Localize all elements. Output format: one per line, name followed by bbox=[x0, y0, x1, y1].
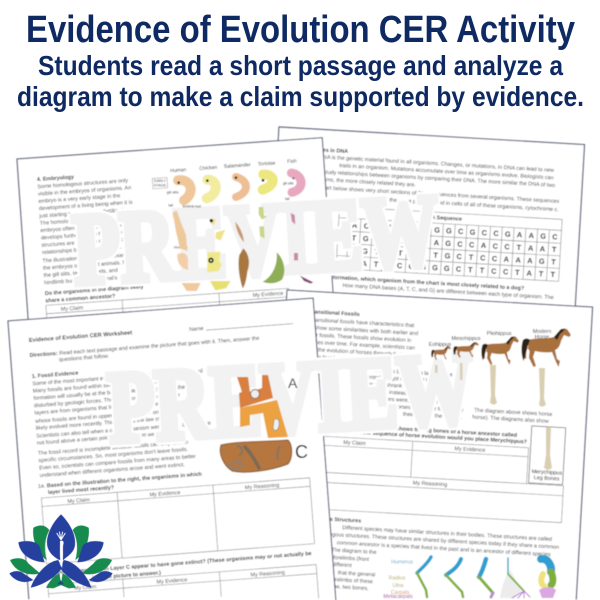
text block: homologous passage bbox=[311, 524, 560, 600]
text block: fossil evidence passage: formation will usually be at the bottom, unless the layers are then bbox=[33, 384, 188, 402]
text block: fossil evidence passage: specific circumstances. So, most organisms don't leave fossils. bbox=[38, 447, 188, 464]
illustration: horse evolution bbox=[429, 328, 571, 470]
watermark: PREVIEW bottom: PREVIEW bbox=[105, 332, 477, 465]
labels: horse names: Mesohippus bbox=[451, 336, 481, 342]
text block: embryology question bbox=[45, 284, 144, 304]
watermark: PREVIEW top: PREVIEW bbox=[70, 174, 442, 307]
text block: DNA passage: organisms, the more closely related they are. bbox=[308, 176, 416, 188]
illustration: fossil rock layers bbox=[220, 375, 308, 472]
text block: directions: Directions: Read each text passage and examine the picture that goes with it. Then, answer the bbox=[29, 336, 260, 359]
panel: embryology worksheet page bbox=[17, 138, 334, 329]
text block: embryology passage: the gill slits, tail, limb buds, and bbox=[43, 268, 118, 279]
labels: organism names: Tortoise bbox=[258, 160, 276, 168]
labels: horse names bbox=[429, 329, 551, 348]
table: question 1b CER: My Evidence bbox=[156, 577, 188, 586]
text block: embryology passage: Some homologous structures are only bbox=[37, 178, 129, 190]
text block: fossil evidence passage: likely evolved more recently. This is called the law of bbox=[36, 416, 161, 432]
text block: transitional fossils passage: The bones of horses became as large as the bbox=[346, 366, 453, 378]
labels: organism names bbox=[154, 158, 297, 249]
chart: DNA sequence table: ACATGCGGGCGCCGAAGC bbox=[352, 221, 559, 242]
text block: transitional fossils passage: their Hippus, the muscle. bbox=[403, 412, 462, 421]
form field: name bbox=[189, 319, 293, 333]
text block: Merychippus question: Merychippus. Based on this, where in the sequence of horse evolution would you place Merychippus? bbox=[265, 425, 527, 445]
text block: question 1a: layer lived most recently? bbox=[48, 485, 114, 496]
text block: transitional fossils passage: in horses are earlier found near bbox=[389, 404, 464, 414]
text block: transitional fossils passage: horses instead of other rapid central bbox=[371, 389, 457, 400]
text block: embryology passage: develops further. These homologous bbox=[41, 229, 128, 242]
text block: transitional fossils passage: show some similarities with both earlier and bbox=[314, 325, 418, 337]
text block: question 1a: 1a. Based on the illustration to the right, the organisms in which bbox=[38, 472, 202, 490]
text block: homologous passage: different bbox=[332, 562, 352, 569]
text block: fossil evidence passage: 1. Fossil Evidence bbox=[32, 370, 79, 380]
icon: peacock bbox=[47, 514, 75, 584]
illustration: homologous forelimbs bbox=[383, 557, 556, 600]
text block: directions: questions that follow. bbox=[59, 354, 109, 363]
text block: embryology passage: hindlimb buds in each animal's early bbox=[44, 274, 131, 286]
text block: embryology passage: the embryos of different animals. Note bbox=[43, 259, 134, 272]
text block: fossil evidence passage: Even so, scientists can compare fossils from many areas to better bbox=[39, 454, 196, 472]
text block: embryology passage: embryo is a very early stage in the bbox=[38, 193, 121, 205]
text block: transitional fossils passage: horse). The diagrams also show bbox=[472, 415, 549, 425]
labels: bone names bbox=[383, 560, 413, 600]
text block: transitional fossils passage: Transitional fossils have characteristics that bbox=[311, 317, 415, 329]
text block: fossil evidence passage: understand when different organisms arose and went extinct. bbox=[39, 462, 185, 479]
text block: DNA passage: code for the same protein found in cells of all of these organisms, cytochrome c. bbox=[368, 196, 559, 213]
text block: DNA passage: DNA is the genetic material found in all organisms. Changes, or mutations, in DNA can lead to new bbox=[319, 154, 554, 174]
text block: embryology passage: The illustration compares, for example, bbox=[42, 252, 136, 264]
table: question 1a CER: My Evidence bbox=[149, 490, 181, 498]
text block: transitional fossils passage: smaller toes shrank and became even larger bbox=[355, 381, 462, 393]
text block: Merychippus question: 3a. The image on the right shows the leg bones of a horse ancestor called bbox=[328, 422, 517, 439]
panel: main worksheet page bbox=[8, 298, 336, 600]
chart: DNA sequence table: TGATCGTAGCCACCTAAT bbox=[351, 233, 557, 254]
text block: DNA passage: study relationships between organisms by comparing their DNA. The more similar the DNA of two bbox=[323, 170, 555, 189]
text block: fossil evidence passage: layers are from organisms that lived long ago. Organisms bbox=[34, 400, 171, 417]
labels: bone names: Carpals bbox=[391, 590, 410, 596]
label A: A bbox=[288, 375, 298, 391]
text block: fossil evidence passage: Many fossils are found within sedimentary rock. Older rock layers form bbox=[33, 376, 201, 395]
heading: worksheet title: Evidence of Evolution CER Worksheet bbox=[29, 330, 133, 344]
text block: fossil evidence passage: whose fossils are found in upper layers not lower ones, bbox=[34, 409, 167, 425]
text block: transitional fossils passage: species over time. For example, scientists can bbox=[305, 339, 415, 352]
table: question 1b CER bbox=[48, 565, 319, 600]
labels: organism names: gill slits bbox=[283, 182, 294, 186]
text block: fossil evidence passage bbox=[31, 361, 214, 479]
labels: organism names: Fish bbox=[287, 158, 297, 165]
table: embryology CER: My Claim bbox=[61, 305, 84, 313]
text block: homologous passage: Different species may have similar structures in their bodies. These structures are called bbox=[342, 525, 552, 543]
illustration: embryo chart bbox=[152, 158, 313, 291]
table: transitional CER: My Evidence bbox=[454, 446, 485, 454]
text block: embryology passage: development of a living being when it is bbox=[39, 200, 133, 212]
text block: DNA passage: traits in an organism. Mutations accumulate over time as organisms evolve. Biologists can bbox=[339, 163, 554, 181]
text block: homologous passage: common ancestor is a species that lived in the past and is an ancestor of different species bbox=[337, 540, 551, 558]
table: question 1b CER: My Claim bbox=[74, 584, 97, 592]
labels: horse names: Horse bbox=[535, 334, 549, 340]
text block: embryology passage: structures are evidence of evolutionary bbox=[41, 236, 134, 249]
form field: name: Name bbox=[189, 326, 204, 333]
box: Merychippus leg bones: Merychippus bbox=[531, 469, 563, 477]
icon: early stage embryos bbox=[177, 173, 301, 200]
table: transitional CER: My Claim bbox=[343, 440, 366, 447]
text block: transitional fossils passage: central toe got larger and the other bbox=[364, 374, 447, 385]
panel: DNA worksheet page bbox=[268, 127, 584, 334]
text block: homologous passage: The diagram to the bbox=[331, 547, 377, 556]
labels: organism names: Human bbox=[170, 167, 187, 174]
table: question 1b CER: My Reasoning bbox=[250, 570, 285, 579]
text block: transitional fossils passage: trace the evolution of horses through their bbox=[304, 347, 404, 358]
text block: fossil evidence passage: The fossil record is incomplete because fossils can only form in bbox=[38, 440, 189, 457]
layer A bbox=[237, 375, 273, 408]
text block: homologous passage: forelimbs (front bbox=[333, 555, 370, 563]
text block: embryology passage bbox=[36, 178, 141, 286]
labels: organism names: tail bbox=[285, 197, 290, 201]
layer B bbox=[240, 400, 288, 438]
table: transitional CER: My Reasoning bbox=[413, 480, 447, 488]
text block: homologous passage: forelimbs of these bbox=[330, 577, 373, 585]
labels: horse names: Pliohippus bbox=[487, 331, 512, 337]
labels: horse names: Eohippus bbox=[429, 342, 452, 348]
labels: organism names: Salamander bbox=[224, 162, 251, 170]
watermark: PREVIEW bottom: PREVIEW bbox=[105, 332, 477, 465]
chart: DNA sequence table: DNA Sequence bbox=[423, 214, 462, 223]
text block: embryology passage: embryos often disappear as the animal bbox=[40, 222, 133, 234]
labels: organism names: STAGE bbox=[154, 184, 167, 188]
icon: lotus petals left bbox=[9, 525, 62, 588]
text block: embryology passage: just starting to form from a fertilized egg. bbox=[38, 207, 136, 220]
text block: embryology passage: The homologous structures are visible in bbox=[40, 214, 137, 227]
watermark: PREVIEW top: PREVIEW bbox=[70, 174, 442, 307]
text block: DNA question bbox=[282, 272, 554, 301]
text block: embryology question: share a common ancestor? bbox=[45, 293, 116, 304]
labels: organism names: gill slits bbox=[167, 190, 179, 194]
subtitle bbox=[17, 50, 584, 112]
text block: transitional fossils passage: their foot bones. bbox=[310, 354, 349, 363]
text block: fossil evidence passage: not found above a certain point, that organism went extinct. bbox=[37, 430, 178, 447]
table: question 1a CER bbox=[41, 478, 315, 564]
text block: DNA passage bbox=[307, 154, 561, 213]
text block: question 1b: Use the picture to answer.) bbox=[92, 570, 161, 581]
text block: fossil evidence passage: Scientists can also tell when a certain organism went extinct. If fossils are bbox=[36, 421, 211, 440]
text block: question 1b: Do the organisms in Layer C appear to have gone extinct? (These organisms may or not actually be bbox=[57, 551, 312, 576]
icon: middle stage embryo fragments bbox=[173, 207, 298, 260]
text block: transitional fossils passage: later fossils. These fossils show evolution in bbox=[307, 332, 412, 344]
labels: organism names: Chicken bbox=[199, 165, 218, 172]
text block: DNA question: 5a. Based on this information, which organism from the chart is most closely related to a dog? bbox=[282, 272, 524, 292]
panel: transitional fossils page bbox=[256, 289, 593, 600]
table: transitional CER bbox=[295, 435, 566, 523]
text block: transitional fossils passage: fingers were, horses. (The bones bbox=[378, 396, 457, 407]
labels: bone names: Ulna bbox=[392, 583, 404, 589]
text block: embryology passage: visible in the embryos of organisms. An bbox=[38, 185, 131, 198]
heading: change in DNA: 5. Changes in DNA bbox=[300, 146, 348, 155]
text block: homologous passage: homologous structures. These structures are shared by different species today if they share a common bbox=[314, 531, 559, 551]
box: Merychippus leg bones: Leg Bones bbox=[534, 475, 560, 483]
label C: C bbox=[295, 442, 308, 462]
heading: embryology: 4. Embryology bbox=[37, 174, 74, 183]
labels: bone names: Metacarpals bbox=[383, 594, 413, 600]
table: question 1a CER: My Reasoning bbox=[245, 483, 280, 491]
labels: bone names: Humerus bbox=[391, 560, 413, 566]
icon: leg bones bbox=[435, 363, 552, 470]
labels: organism names: hindlimb bbox=[174, 245, 187, 249]
labels: bone names: Radius bbox=[389, 576, 406, 582]
labels: organism names: tail bbox=[168, 203, 173, 207]
chart: DNA sequence table: AGTATAGTGCTCCAAAGT bbox=[350, 246, 556, 267]
text block: homologous passage: one, two bones, bbox=[330, 584, 369, 592]
labels: horse names: Modern bbox=[533, 329, 551, 335]
logo: lotus peacock bbox=[9, 514, 113, 588]
heading: homologous structures: 2. Homologous Structures bbox=[294, 515, 361, 524]
labels: organism names: EARLY bbox=[154, 179, 166, 183]
layer C bbox=[220, 440, 292, 472]
text block: fossil evidence passage: Some of the most important evidence of evolution comes from the fossil bbox=[32, 369, 203, 387]
table: question 1a CER: My Claim bbox=[67, 497, 91, 505]
text block: DNA passage: The chart below shows very short sections of DNA sequences from several organisms. These sequences bbox=[309, 185, 560, 205]
text block: transitional fossils passage bbox=[301, 317, 557, 426]
icon: lotus petals right bbox=[60, 525, 113, 588]
labels: organism names: forelimb bud bbox=[182, 205, 201, 209]
table: embryology CER bbox=[46, 288, 290, 322]
text block: embryology passage: relationships between organisms. bbox=[42, 245, 122, 256]
heading: transitional fossils: 3. Transitional Fossils bbox=[303, 309, 360, 318]
box: Merychippus leg bones bbox=[529, 426, 566, 485]
icon: late stage embryos bbox=[177, 248, 313, 291]
text block: fossil evidence passage: disturbed by geologic forces. Therefore, fossils found in lower bbox=[34, 392, 181, 409]
text block: embryology question: Do the organisms in the diagram likely bbox=[45, 284, 144, 297]
text block: homologous passage: that the general bbox=[338, 570, 375, 578]
table: embryology CER: My Evidence bbox=[252, 291, 284, 299]
chart: DNA sequence table bbox=[336, 207, 562, 281]
chart: DNA sequence table: CATACGGGGCTTCCTATT bbox=[350, 258, 556, 279]
text block: DNA question: How many DNA bases (A, T, C, and G) are different between each type of organism. The bbox=[342, 283, 554, 301]
text block: transitional fossils passage: The diagram above shows horse bbox=[474, 408, 552, 418]
